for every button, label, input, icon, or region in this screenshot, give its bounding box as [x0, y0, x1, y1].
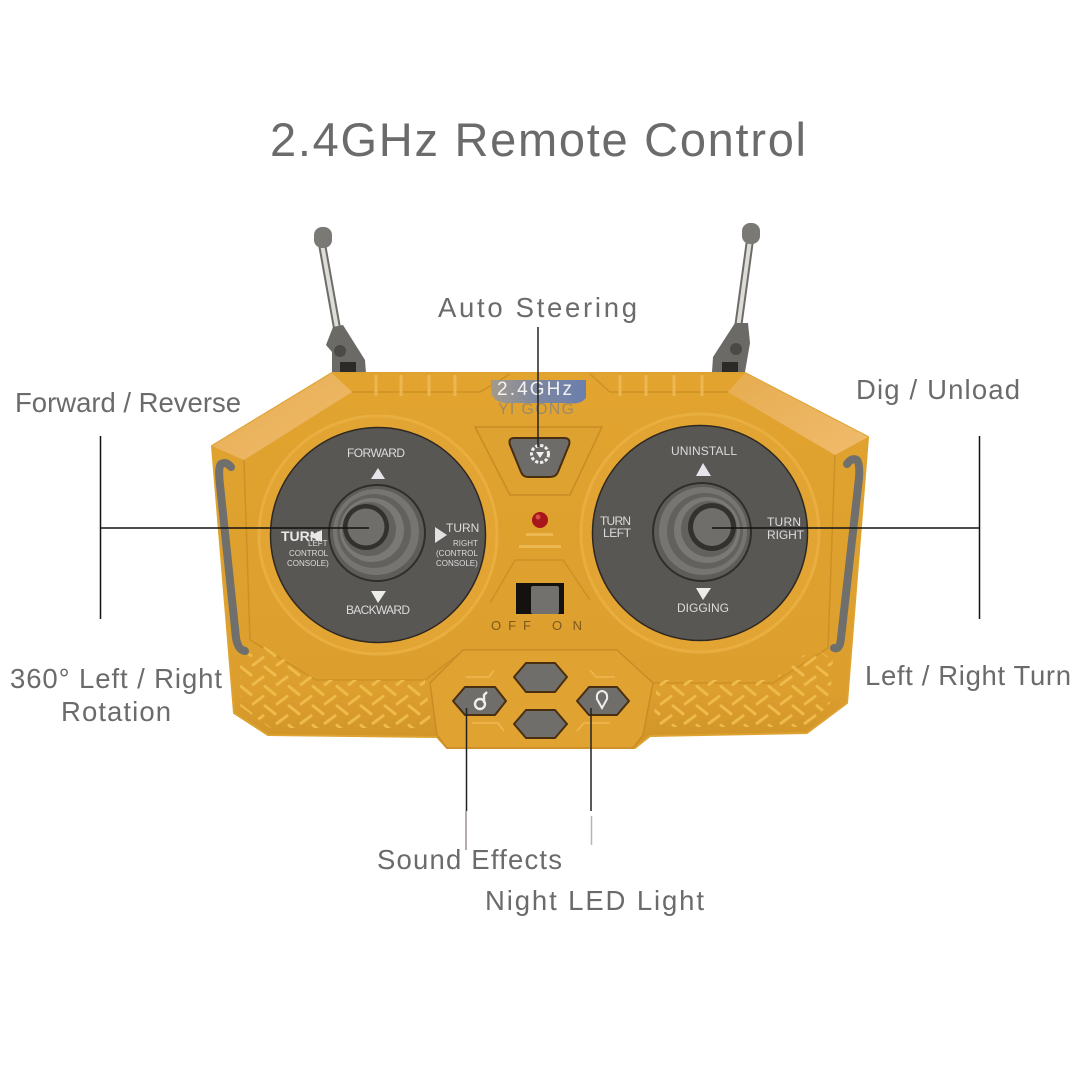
turn left label: TURN: [600, 514, 631, 528]
icon: bulb: [597, 691, 607, 708]
upper blank button: [514, 663, 567, 692]
digging label: DIGGING: [677, 601, 729, 615]
right side label: [435, 521, 479, 568]
switch label on: ON: [552, 618, 582, 633]
left side label: CONTROL: [289, 549, 329, 558]
label: sound effects: Sound Effects: [377, 844, 562, 875]
badge text: 2.4GHz: [497, 379, 572, 400]
leader lines: right joystick: [712, 436, 980, 619]
leader line: night led light: [590, 708, 592, 845]
label: forward / reverse: Forward / Reverse: [15, 387, 241, 418]
right antenna: [712, 223, 760, 372]
label: 360 rotation: [10, 663, 222, 727]
turn right label: TURN: [767, 515, 801, 529]
badge: [491, 380, 586, 403]
tread plate right: [653, 647, 833, 727]
top left bevel: [212, 373, 352, 460]
title: 2.4GHz Remote Control: [270, 113, 806, 166]
right side label: TURN: [446, 521, 479, 535]
right handle: [834, 459, 859, 648]
lower blank button: [514, 710, 567, 738]
leader line: auto steering: [537, 327, 539, 447]
light button: [577, 687, 629, 715]
brand text: YI GONG: [498, 401, 574, 418]
status led: [519, 512, 561, 548]
bottom button module: [430, 650, 653, 748]
icon: gear: [532, 446, 548, 462]
tread plate left: [240, 645, 432, 728]
backward label: BACKWARD: [346, 603, 410, 617]
label: 360 rotation: 360° Left / Right: [10, 663, 222, 694]
remote control device: [212, 223, 868, 748]
switch label off: OFF: [491, 618, 531, 633]
left control disc: [259, 416, 497, 654]
left handle: [219, 463, 245, 651]
uninstall label: UNINSTALL: [671, 444, 737, 458]
left side label: CONSOLE): [287, 559, 329, 568]
label: left / right turn: Left / Right Turn: [865, 660, 1071, 691]
right side label: (CONTROL: [436, 549, 478, 558]
left antenna: [314, 227, 366, 373]
turn left label: [600, 514, 632, 540]
left side label: LEFT: [308, 539, 328, 548]
top grille ribs: [376, 375, 702, 396]
leader lines: left joystick: [100, 436, 369, 619]
left side label: [281, 528, 329, 568]
joystick: [653, 483, 751, 581]
right side label: RIGHT: [453, 539, 478, 548]
raised face outline: [244, 374, 835, 683]
turn left label: LEFT: [603, 526, 632, 540]
label: dig / unload: Dig / Unload: [856, 374, 1020, 405]
icon: sound: [475, 692, 487, 709]
label: night led light: Night LED Light: [485, 885, 704, 916]
turn right label: [767, 515, 805, 542]
button module accents: [466, 670, 615, 731]
forward label: FORWARD: [347, 446, 405, 460]
right side label: CONSOLE): [436, 559, 478, 568]
auto steering button: [510, 438, 569, 477]
center panel: [475, 427, 602, 495]
right control disc: [581, 414, 819, 652]
remote body: [212, 373, 868, 748]
power switch: [516, 583, 564, 614]
label: auto steering: Auto Steering: [438, 292, 637, 323]
switch panel outline: [490, 560, 590, 603]
left side label: TURN: [281, 528, 320, 544]
label: 360 rotation: Rotation: [61, 696, 171, 727]
turn right label: RIGHT: [767, 528, 805, 542]
sound button: [453, 687, 506, 715]
top right bevel: [728, 373, 868, 455]
joystick: [329, 485, 425, 581]
leader line: sound effects: [465, 708, 468, 850]
